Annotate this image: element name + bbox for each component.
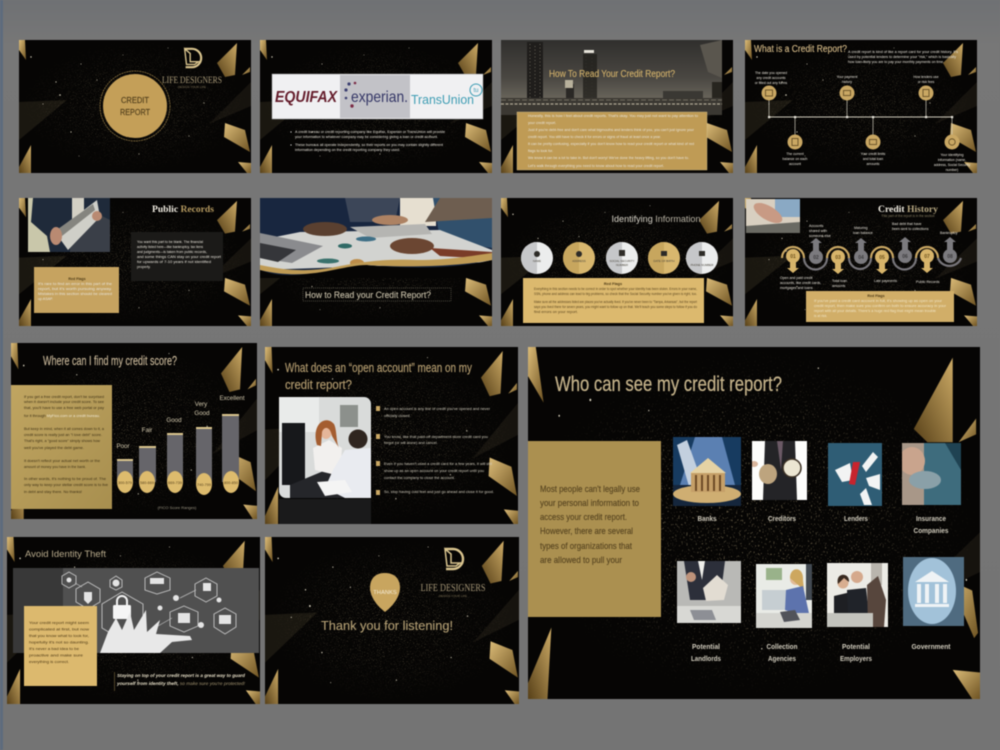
- organization labels: Potential: [692, 642, 720, 651]
- image: creditors: [751, 440, 808, 501]
- organization labels: Companies: [914, 526, 948, 535]
- bar chart: FICO score ranges: Excellent: [219, 395, 245, 402]
- bullet list: So, stop having cold feet and just go ahead and close it for good.: [384, 490, 494, 494]
- slide heading: Avoid Identity Theft: [25, 549, 106, 560]
- timeline chart: history: [842, 80, 852, 84]
- image: insurance companies: [901, 442, 962, 506]
- bureau logos band: EQUIFAX: [275, 89, 338, 106]
- gold text box: It's never a bad idea to be: [29, 646, 79, 651]
- identity circles: PHONE NUMBER: [691, 263, 713, 267]
- red flags box: Red Flags: [867, 294, 885, 298]
- slide heading: Where can I find my credit score?: [43, 353, 177, 368]
- bureau bullets: [290, 130, 445, 152]
- gold text box: [24, 606, 97, 686]
- bureau bullets: information depending on the credit reporting company they used.: [295, 148, 400, 152]
- logo: life designers: DESIGN YOUR LIFE: [178, 85, 206, 89]
- gold text box: [517, 112, 707, 170]
- red flags box: credit report, then make sure you confirm on both to ensure accuracy in your: [814, 304, 947, 308]
- closing italic note: yourself from identity theft, so make sure you're protected!: [116, 681, 246, 686]
- gold text box: We know it can be a lot to take in. But don't worry! We've done the heavy lifting, so you don't have to.: [528, 156, 689, 160]
- winding steps diagram: 01: [790, 254, 796, 260]
- bar chart: FICO score ranges: (FICO Score Ranges): [158, 505, 197, 510]
- bureau bullets: A credit bureau or credit reporting company like Equifax, Experian or TransUnion will provide: [295, 130, 445, 134]
- dark text panel: activity listed here—like bankruptcy, tax liens: [137, 245, 203, 249]
- gold text box: It can be pretty confusing, especially if you don't know how to read your credit report or what kind of red: [528, 142, 694, 146]
- red flags box: [34, 267, 119, 313]
- winding steps diagram: mortgages and loans: [780, 286, 813, 290]
- thanks balloon: [370, 573, 400, 612]
- photo: hands on keyboard: [745, 198, 801, 234]
- red flags box: SSN, phone and address can lead to big problems, so check that the Social Security number you've given is right, too.: [534, 292, 697, 296]
- dark text panel: and judgments—is taken from public records,: [137, 250, 207, 254]
- winding steps diagram: accounts, like credit cards,: [780, 281, 821, 285]
- bar chart: FICO score ranges: 300-579: [118, 481, 132, 485]
- bullet list: You know, like that paid-off department store credit card you: [384, 435, 488, 439]
- panel: how to read slide: [501, 40, 733, 173]
- red flags box: Everything in this section needs to be correct in order to spot whether your identity has been stolen. Errors in your name,: [534, 287, 697, 291]
- bullet list: officially closed.: [384, 414, 411, 418]
- image: collection agencies: [755, 563, 813, 629]
- gold text box: your credit report.: [528, 121, 556, 125]
- gold text box: Your credit report might seem: [29, 620, 89, 625]
- organization labels: Landlords: [691, 654, 721, 663]
- slide heading: Public Records: [152, 204, 215, 214]
- dark text panel: [131, 232, 223, 281]
- gold text box: Let's walk through everything you need to know about how to read your credit report.: [528, 164, 664, 168]
- identity circles: NUMBER: [616, 263, 628, 267]
- intro text: [848, 50, 958, 64]
- bullet list: show up as an open account on your credit report until you: [384, 469, 484, 473]
- timeline chart: balance on each: [783, 157, 808, 161]
- red flags box: Red Flags: [68, 277, 86, 281]
- gold text box: access your credit report.: [540, 512, 627, 523]
- bar chart: FICO score ranges: Good: [166, 417, 182, 424]
- winding steps diagram: amounts: [832, 284, 846, 288]
- gold text box: flags to look for.: [528, 149, 553, 153]
- photo reflection: [279, 499, 371, 524]
- image: government: [903, 557, 964, 626]
- gold text box: everything is correct.: [29, 659, 69, 664]
- thank you message: Thank you for listening!: [321, 618, 453, 633]
- bureau logos band: TransUnion: [411, 93, 474, 107]
- winding steps diagram: Accounts: [809, 224, 824, 228]
- dark text panel: properly.: [137, 265, 151, 269]
- closing italic note: Staying on top of your credit report is a great way to guard: [117, 673, 245, 678]
- photo: digital security hand: [12, 568, 260, 654]
- timeline chart: amounts: [866, 162, 880, 166]
- gold circle badge: [100, 71, 170, 141]
- gold text box: If you get a free credit report, don't be surprised: [24, 395, 104, 399]
- organization labels: Potential: [842, 642, 870, 651]
- identity circles: ADDRESS: [572, 259, 586, 263]
- bar chart: FICO score ranges: Good: [194, 410, 210, 417]
- winding steps diagram: Public Records: [916, 280, 940, 284]
- gold text box: [528, 441, 661, 617]
- thanks balloon: THANKS: [373, 590, 397, 596]
- organization labels: Banks: [698, 514, 716, 523]
- panel: identifying information slide: [501, 198, 733, 326]
- bar chart: FICO score ranges: [116, 395, 245, 510]
- winding steps diagram: Late payments: [874, 279, 897, 283]
- red flags box: It's rare to find an error in this part of the: [38, 282, 112, 286]
- gold text box: In other words, it's nothing to be proud of. The: [24, 477, 106, 481]
- gold text box: Just if you're debt-free and don't care what bigmouths and lenders think of you, you can't just ignore your: [528, 128, 695, 132]
- slide heading: How To Read Your Credit Report?: [549, 68, 675, 80]
- bar chart: FICO score ranges: Poor: [116, 443, 130, 450]
- panel: who can see my credit report slide: [528, 347, 996, 699]
- panel: open account slide: [265, 347, 518, 524]
- timeline chart: [755, 71, 970, 172]
- closing italic note: [114, 672, 246, 691]
- bureau bullets: your information to whatever company may be considering giving a loan or credit account.: [295, 135, 438, 139]
- gold circle badge: REPORT: [120, 108, 150, 117]
- slide heading: Who can see my credit report?: [555, 373, 782, 396]
- image: potential employers: [826, 562, 889, 628]
- intro text: A credit report is kind of like a report card for your credit history. It's: [848, 50, 958, 54]
- panel: credit history slide: [745, 198, 977, 326]
- timeline chart: The current: [786, 152, 804, 156]
- organization labels: Insurance: [916, 514, 946, 523]
- red flags box: Red Flags: [604, 282, 622, 286]
- bar chart: FICO score ranges: 669-739: [168, 481, 182, 485]
- bar chart: FICO score ranges: 580-669: [140, 481, 154, 485]
- winding steps diagram: 07: [924, 254, 930, 260]
- winding steps diagram: Maturing: [854, 226, 868, 230]
- timeline chart: The date you opened: [755, 71, 787, 75]
- gold text box: It doesn't reflect your actual net worth or the: [24, 459, 100, 463]
- identity circles: NAME: [533, 259, 541, 263]
- gold text box: credit report. You still have to check it for errors or signs of fraud at least once a year.: [528, 135, 661, 139]
- gold text box: types of organizations that: [540, 541, 632, 552]
- timeline chart: information (name,: [938, 158, 966, 162]
- winding steps diagram: loan balance: [853, 231, 873, 235]
- bullet list: contact the company to close the account.: [384, 476, 455, 480]
- winding steps diagram: Bad debt that have: [892, 222, 921, 226]
- timeline chart: account: [789, 162, 801, 166]
- slide heading: credit report?: [285, 378, 352, 392]
- slide heading: What is a Credit Report?: [754, 44, 847, 55]
- slide heading: Credit History: [878, 204, 939, 214]
- logo: life designers: LIFE DESIGNERS: [420, 583, 486, 594]
- winding steps diagram: [780, 222, 961, 290]
- winding steps diagram: 08: [947, 254, 953, 260]
- red flags box: report with all your details. There's a huge red flag that might mean trouble: [814, 309, 936, 313]
- gold text box: However, there are several: [540, 526, 633, 537]
- red flags box: up ASAP.: [38, 297, 53, 301]
- red flags box: [523, 278, 704, 323]
- logo: life designers: [420, 549, 486, 598]
- identity circles: DATE OF BIRTH: [653, 259, 675, 263]
- timeline chart: any credit accounts: [756, 76, 786, 80]
- slide heading: [878, 204, 939, 218]
- red flags box: says you lived there for seven years, you might want to follow up on that. We'll teach you some steps to follow if you do: [534, 305, 697, 309]
- panel: credit report title slide: [19, 40, 251, 173]
- red flags box: Mistakes in this section should be cleared: [38, 292, 112, 296]
- gold circle badge: CREDIT: [121, 96, 149, 105]
- bullet list: forgot (or will alone) and cancel.: [384, 441, 438, 445]
- timeline chart: How lenders use: [913, 75, 939, 79]
- gold text box: [11, 385, 112, 509]
- winding steps diagram: someone else: [809, 234, 831, 238]
- gold text box: are allowed to pull your: [540, 555, 622, 566]
- logo: life designers: LIFE DESIGNERS: [162, 75, 222, 85]
- dashed title box: How to Read your Credit Report?: [305, 290, 431, 300]
- bar chart: FICO score ranges: Very: [195, 401, 208, 408]
- gold text box: credit score is really just an "I love debt" score.: [24, 433, 102, 437]
- gold text box: Honestly, this is how I feel about credit reports. That's okay. You may just not want to pay attention to: [528, 114, 698, 118]
- city skyline photo: [501, 40, 722, 115]
- panel: public records slide: [19, 198, 251, 326]
- gold text box: in debt and stay there. No thanks!: [24, 490, 82, 494]
- dark text panel: You want this part to be blank. The financial: [137, 240, 203, 244]
- red flags box: [806, 291, 954, 322]
- timeline chart: and total loan: [863, 157, 883, 161]
- timeline chart: Your payment: [837, 75, 857, 79]
- panel: avoid identity theft slide: [7, 537, 260, 704]
- bar chart: FICO score ranges: 800-850: [224, 481, 238, 485]
- bureau bullets: These bureaus all operate independently, so their reports on you may contain slightly different: [295, 143, 443, 147]
- dark text panel: and some things CAN stay on your credit report: [137, 255, 221, 259]
- organization labels: Lenders: [844, 514, 868, 523]
- bureau logos band: [272, 74, 483, 119]
- timeline chart: Your credit limits: [861, 152, 886, 156]
- slide heading: What does an “open account” mean on my: [285, 361, 473, 375]
- bar chart: FICO score ranges: Fair: [142, 427, 152, 434]
- winding steps diagram: Total loan: [832, 279, 847, 283]
- slide heading: Identifying Information: [612, 214, 700, 224]
- timeline chart: Your identifying: [940, 153, 964, 157]
- logo: life designers: DESIGN YOUR LIFE: [439, 594, 467, 598]
- winding steps diagram: shared with: [809, 229, 827, 233]
- gold text box: That's right, a "good score" simply shows how: [24, 439, 100, 443]
- gold text box: But keep in mind, when it all comes down to it, a: [24, 427, 105, 431]
- photo: man holding folders: [27, 197, 110, 253]
- organization labels: Government: [912, 642, 951, 651]
- image: potential landlords: [676, 560, 742, 624]
- slide heading: [285, 361, 473, 392]
- winding steps diagram: 03: [835, 255, 841, 261]
- organization labels: Collection: [766, 642, 798, 651]
- red flags box: Make sure all the addresses listed are places you've actually lived. If you've never been to "Tampa, Arkansas", but the report: [534, 300, 697, 304]
- red flags box: If you've paid a credit card account in full, it's showing up as open on your: [814, 299, 943, 303]
- bullet list: Even if you haven't used a credit card for a few years, it will still: [384, 462, 492, 466]
- organization labels: Employers: [840, 654, 872, 663]
- winding steps diagram: 04: [858, 255, 864, 261]
- red flags box: is at risk.: [814, 314, 827, 318]
- gold text box: proactive and make sure: [29, 652, 83, 658]
- timeline chart: number): [946, 168, 958, 172]
- photo: office meeting: [278, 396, 372, 499]
- dark text panel: for upwards of 7-10 years if not identified: [137, 260, 211, 264]
- gold text box: for it through MyFico.com or a credit bureau.: [24, 414, 100, 418]
- gold text box: that you know what to look for,: [29, 633, 89, 638]
- identity circles: [521, 242, 718, 274]
- gold text box: Most people can't legally use: [540, 484, 640, 495]
- timeline chart: or risk fees: [918, 80, 935, 84]
- logo: life designers: [162, 49, 222, 89]
- gold text box: your personal information to: [540, 498, 639, 509]
- dashed title box: [303, 288, 451, 301]
- bullet list: [376, 406, 494, 495]
- gold text box: complicated at first, but now: [29, 626, 89, 632]
- gold text box: well you've played the debt game.: [24, 446, 84, 450]
- image: banks: [672, 436, 742, 506]
- winding steps diagram: 02: [813, 255, 819, 261]
- red flags box: report, but it's worth pursuing anyway.: [38, 287, 112, 291]
- gold text box: only way to keep your stellar credit score is to live: [24, 483, 108, 487]
- panel: how to read your credit report photo slide: [260, 198, 492, 326]
- identity circles: SOCIAL SECURITY: [609, 259, 635, 263]
- panel: credit bureaus slide: [260, 40, 492, 173]
- slide heading: This part of the report is in the section: [881, 214, 935, 218]
- timeline chart: address, Social Security: [934, 163, 970, 167]
- panel: what is a credit report slide: [745, 40, 977, 173]
- bar chart: FICO score ranges: 740-799: [197, 483, 211, 487]
- panel: where can I find my credit score slide: [11, 343, 257, 519]
- winding steps diagram: been sent to collections: [892, 227, 929, 231]
- intro text: used by potential lenders to determine your "risk," which is basically: [848, 55, 956, 59]
- photo: business meeting: [259, 197, 493, 278]
- winding steps diagram: 05: [879, 255, 885, 261]
- gold text box: amount of money you have in the bank.: [24, 465, 86, 469]
- organization labels: Creditors: [768, 514, 796, 523]
- gold text box: hopefully it's not so daunting.: [29, 640, 89, 644]
- winding steps diagram: 06: [902, 254, 908, 260]
- organization labels: Agencies: [768, 654, 796, 663]
- organization labels: [691, 514, 951, 663]
- winding steps diagram: Open and paid credit: [780, 276, 813, 280]
- timeline chart: or filled out any forms: [755, 81, 788, 85]
- intro text: how loan-likely you are to pay your monthly payments on time.: [848, 60, 944, 64]
- red flags box: find errors on your report.: [534, 310, 578, 314]
- gold text box: when it doesn't include your credit score. To see: [24, 400, 104, 404]
- panel: thank you slide: [265, 537, 519, 704]
- bureau logos band: tu: [473, 88, 479, 94]
- image: lenders: [827, 442, 883, 507]
- bullet list: An open account is any line of credit you've opened and never: [384, 407, 491, 411]
- bureau logos band: experian.: [351, 89, 408, 106]
- winding steps diagram: Bankruptcy: [940, 231, 958, 235]
- gold text box: that, you'll have to use a free web portal or pay: [24, 406, 104, 410]
